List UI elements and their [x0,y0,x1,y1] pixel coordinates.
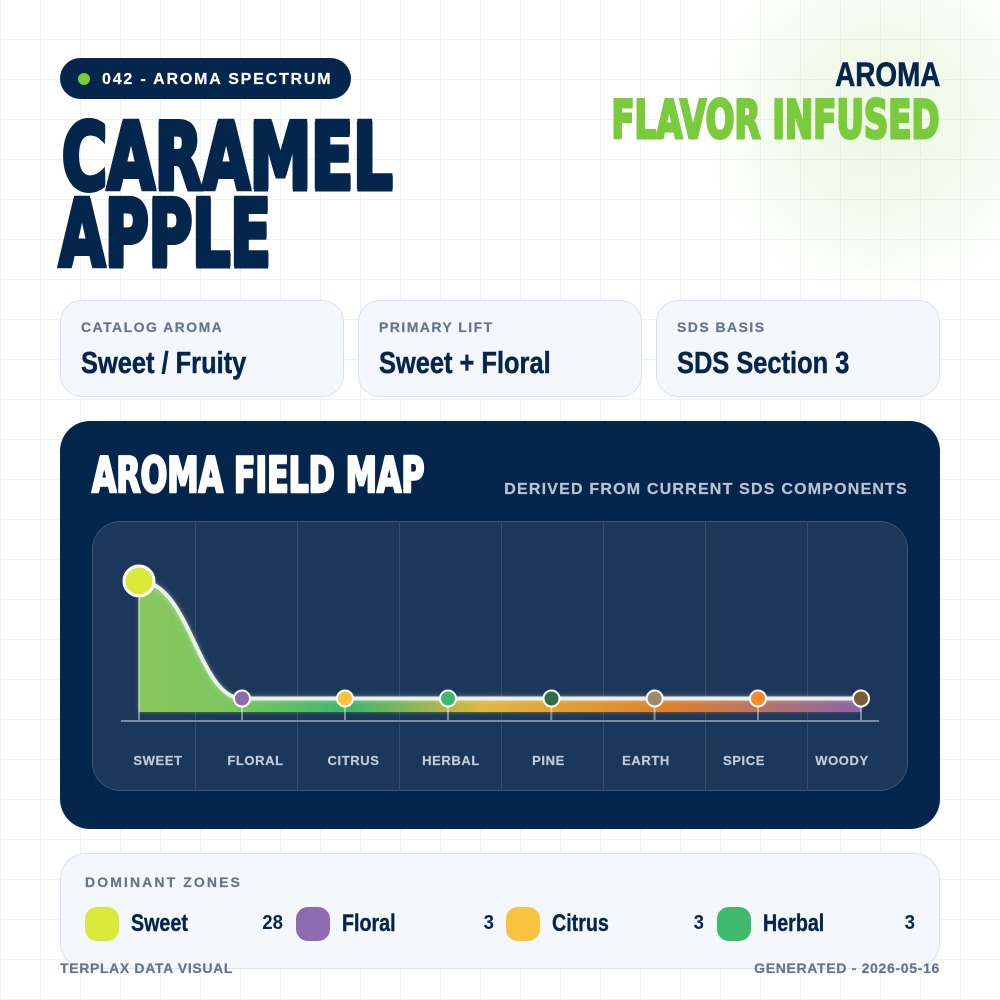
zone: sweet [85,907,283,941]
card value: SDS Section 3 [677,345,849,380]
footer right: GENERATED - 2026-05-16 [754,960,940,976]
name: Herbal [763,910,824,937]
panel subheading: DERIVED FROM CURRENT SDS COMPONENTS [504,481,908,498]
axis labels: FLORAL [227,753,284,768]
footer left: TERPLAX DATA VISUAL [60,960,233,976]
axis labels: CITRUS [328,753,380,768]
dominant zones heading: DOMINANT ZONES [85,874,242,890]
axis labels: SPICE [723,753,765,768]
axis labels [133,753,869,768]
count: 3 [694,912,704,934]
card: catalog aroma [60,300,344,397]
name: Sweet [131,910,188,937]
area fill [139,581,861,712]
card label: CATALOG AROMA [81,319,223,335]
swatch [296,907,330,941]
card: sds basis [656,300,940,397]
name: Citrus [552,910,609,937]
panel heading: AROMA FIELD MAP [92,447,424,504]
name: Floral [342,910,396,937]
chart plot panel [92,522,908,790]
flavor infused label: FLAVOR INFUSED [611,90,939,151]
axis labels: EARTH [622,753,670,768]
axis labels: WOODY [815,753,869,768]
badge: aroma spectrum [60,58,351,99]
badge dot [78,73,90,85]
count: 28 [262,912,283,934]
swatch [85,907,119,941]
panel: aroma field map [60,421,940,829]
baseline axis [121,720,879,722]
data points [124,566,869,706]
zone: herbal [717,907,915,941]
aroma label: AROMA [835,56,940,94]
badge text: 042 - AROMA SPECTRUM [102,71,332,88]
card label: SDS BASIS [677,319,766,335]
count: 3 [484,912,494,934]
zone: floral [296,907,494,941]
drop lines [139,581,861,720]
card value: Sweet + Floral [379,345,551,380]
title line two: APPLE [59,180,271,288]
card label: PRIMARY LIFT [379,319,494,335]
title [57,103,393,288]
aroma curve [139,581,861,698]
swatch [717,907,751,941]
zone: citrus [506,907,704,941]
card: primary lift [358,300,642,397]
panel: dominant zones [60,853,940,969]
count: 3 [905,912,915,934]
swatch [506,907,540,941]
axis labels: SWEET [133,753,183,768]
title line one: CARAMEL [62,103,392,211]
axis labels: PINE [532,753,565,768]
card value: Sweet / Fruity [81,345,246,380]
axis labels: HERBAL [422,753,480,768]
